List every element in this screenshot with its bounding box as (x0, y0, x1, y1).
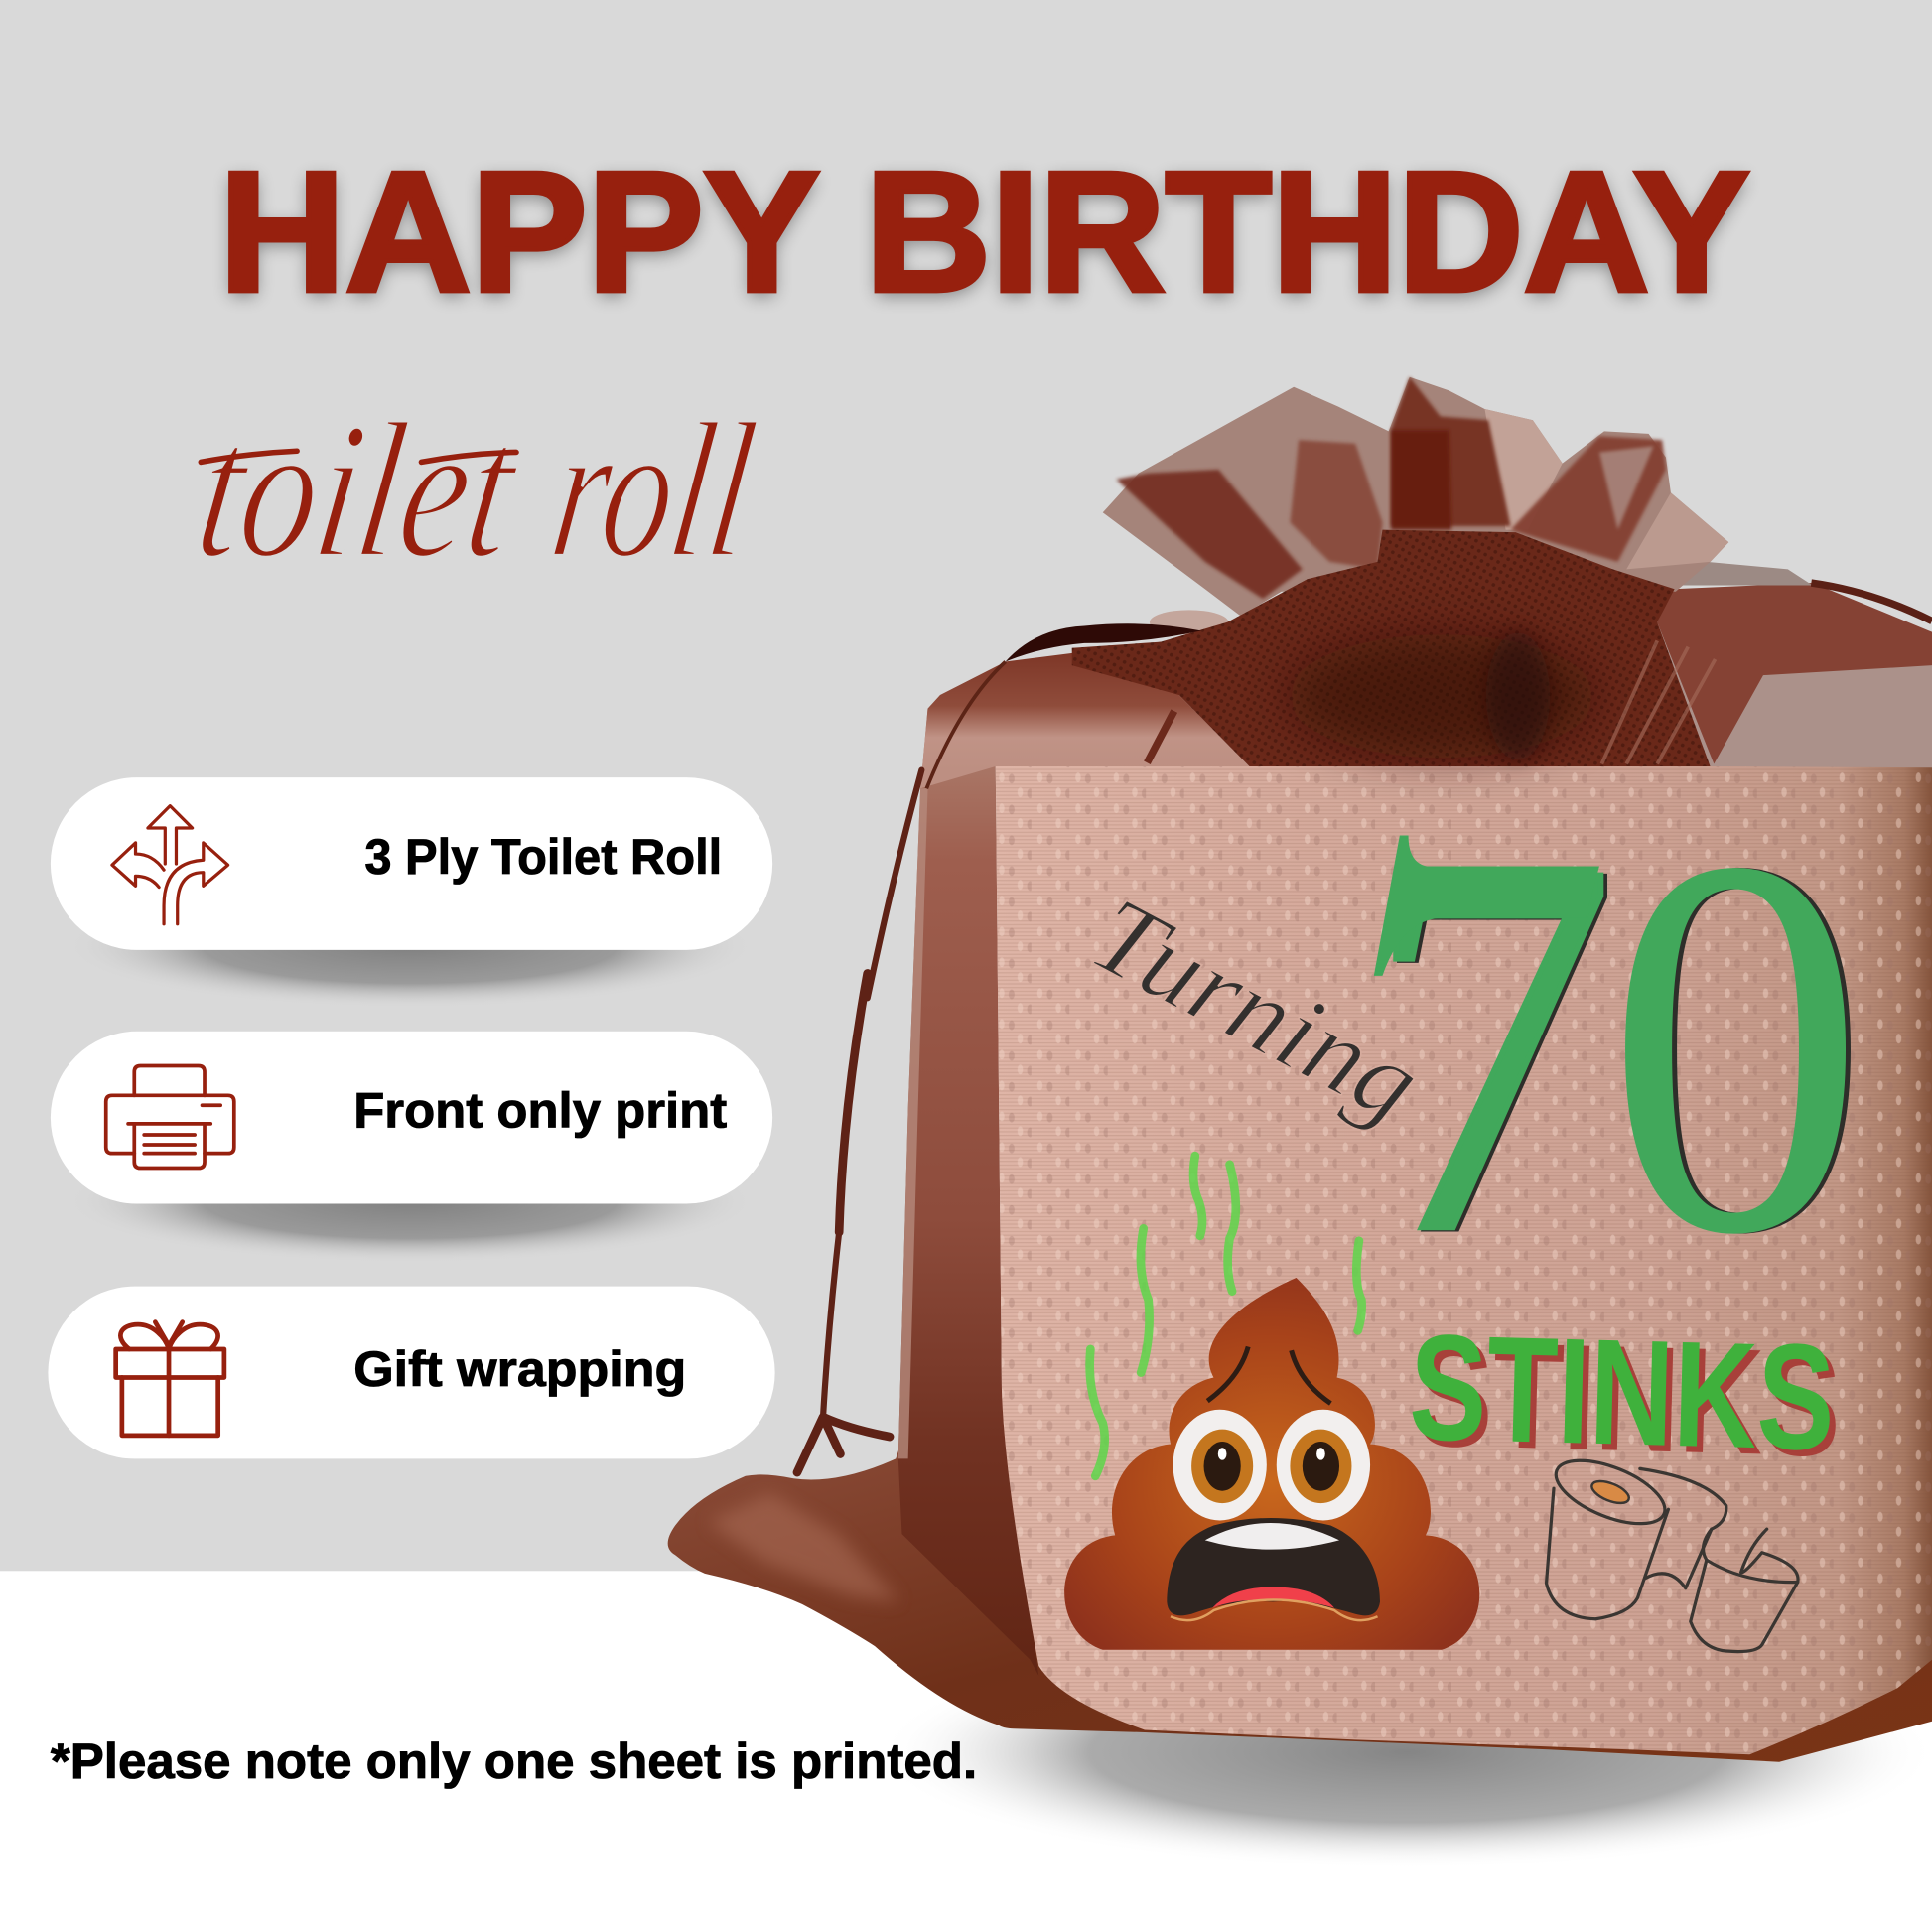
flap highlight (709, 1493, 899, 1601)
drawstring ribbon hanging (797, 770, 921, 1472)
printed text: Turning: Turning (1073, 874, 1440, 1145)
bag left side strip (898, 709, 1038, 1676)
icon: printer (106, 1066, 234, 1169)
floor shadow under the bag (878, 1635, 1932, 1869)
toilet roll line drawing (1547, 1448, 1798, 1652)
printed number: 70: 7 (1366, 751, 1619, 1345)
drawstring ribbon upper left (926, 623, 1201, 788)
bag grey gauze patch (1682, 562, 1813, 586)
feature pill: front only print (51, 1032, 772, 1263)
drawstring ribbon upper right (1811, 583, 1932, 621)
feature pill: 3 ply toilet roll: 3 Ply Toilet Roll (364, 829, 722, 885)
printed number: 70: 0 (1605, 746, 1865, 1346)
icon: three-way arrows (112, 806, 228, 924)
feature pill: gift wrapping (48, 1287, 775, 1458)
feature pill: 3 ply toilet roll (51, 777, 772, 1008)
bag lower-left flap (668, 1417, 1932, 1762)
icon: gift box (116, 1322, 224, 1436)
toilet roll paper (996, 766, 1932, 1754)
gathered dark neck (1072, 530, 1716, 766)
strip pale outer edge (898, 788, 928, 1458)
title: HAPPY BIRTHDAY (219, 136, 1749, 328)
printed number: 70 (1363, 746, 1870, 1346)
footnote: *Please note only one sheet is printed. (51, 1733, 977, 1789)
subtitle: toilet roll: roll (541, 382, 766, 599)
bag gauze left of neck (920, 642, 1249, 788)
printed number: 70: 7 (1363, 750, 1615, 1344)
feature pill: gift wrapping: Gift wrapping (353, 1341, 686, 1397)
feature pill: front only print: Front only print (353, 1083, 727, 1139)
title: HAPPY BIRTHDAY (219, 141, 1749, 333)
bag gauze right of neck (1657, 622, 1932, 767)
pale tuft (1150, 610, 1228, 634)
poop emoji (1064, 1278, 1479, 1650)
stink lines (1090, 1156, 1362, 1476)
product: organza gift bag with toilet roll (668, 377, 1932, 1762)
gathered frill (1103, 377, 1728, 617)
subtitle: toilet roll: toilet (187, 382, 530, 599)
printed number: 70: 0 (1610, 746, 1870, 1346)
background: white lower band (0, 1571, 1932, 1932)
bag upper right fold (1657, 583, 1932, 763)
